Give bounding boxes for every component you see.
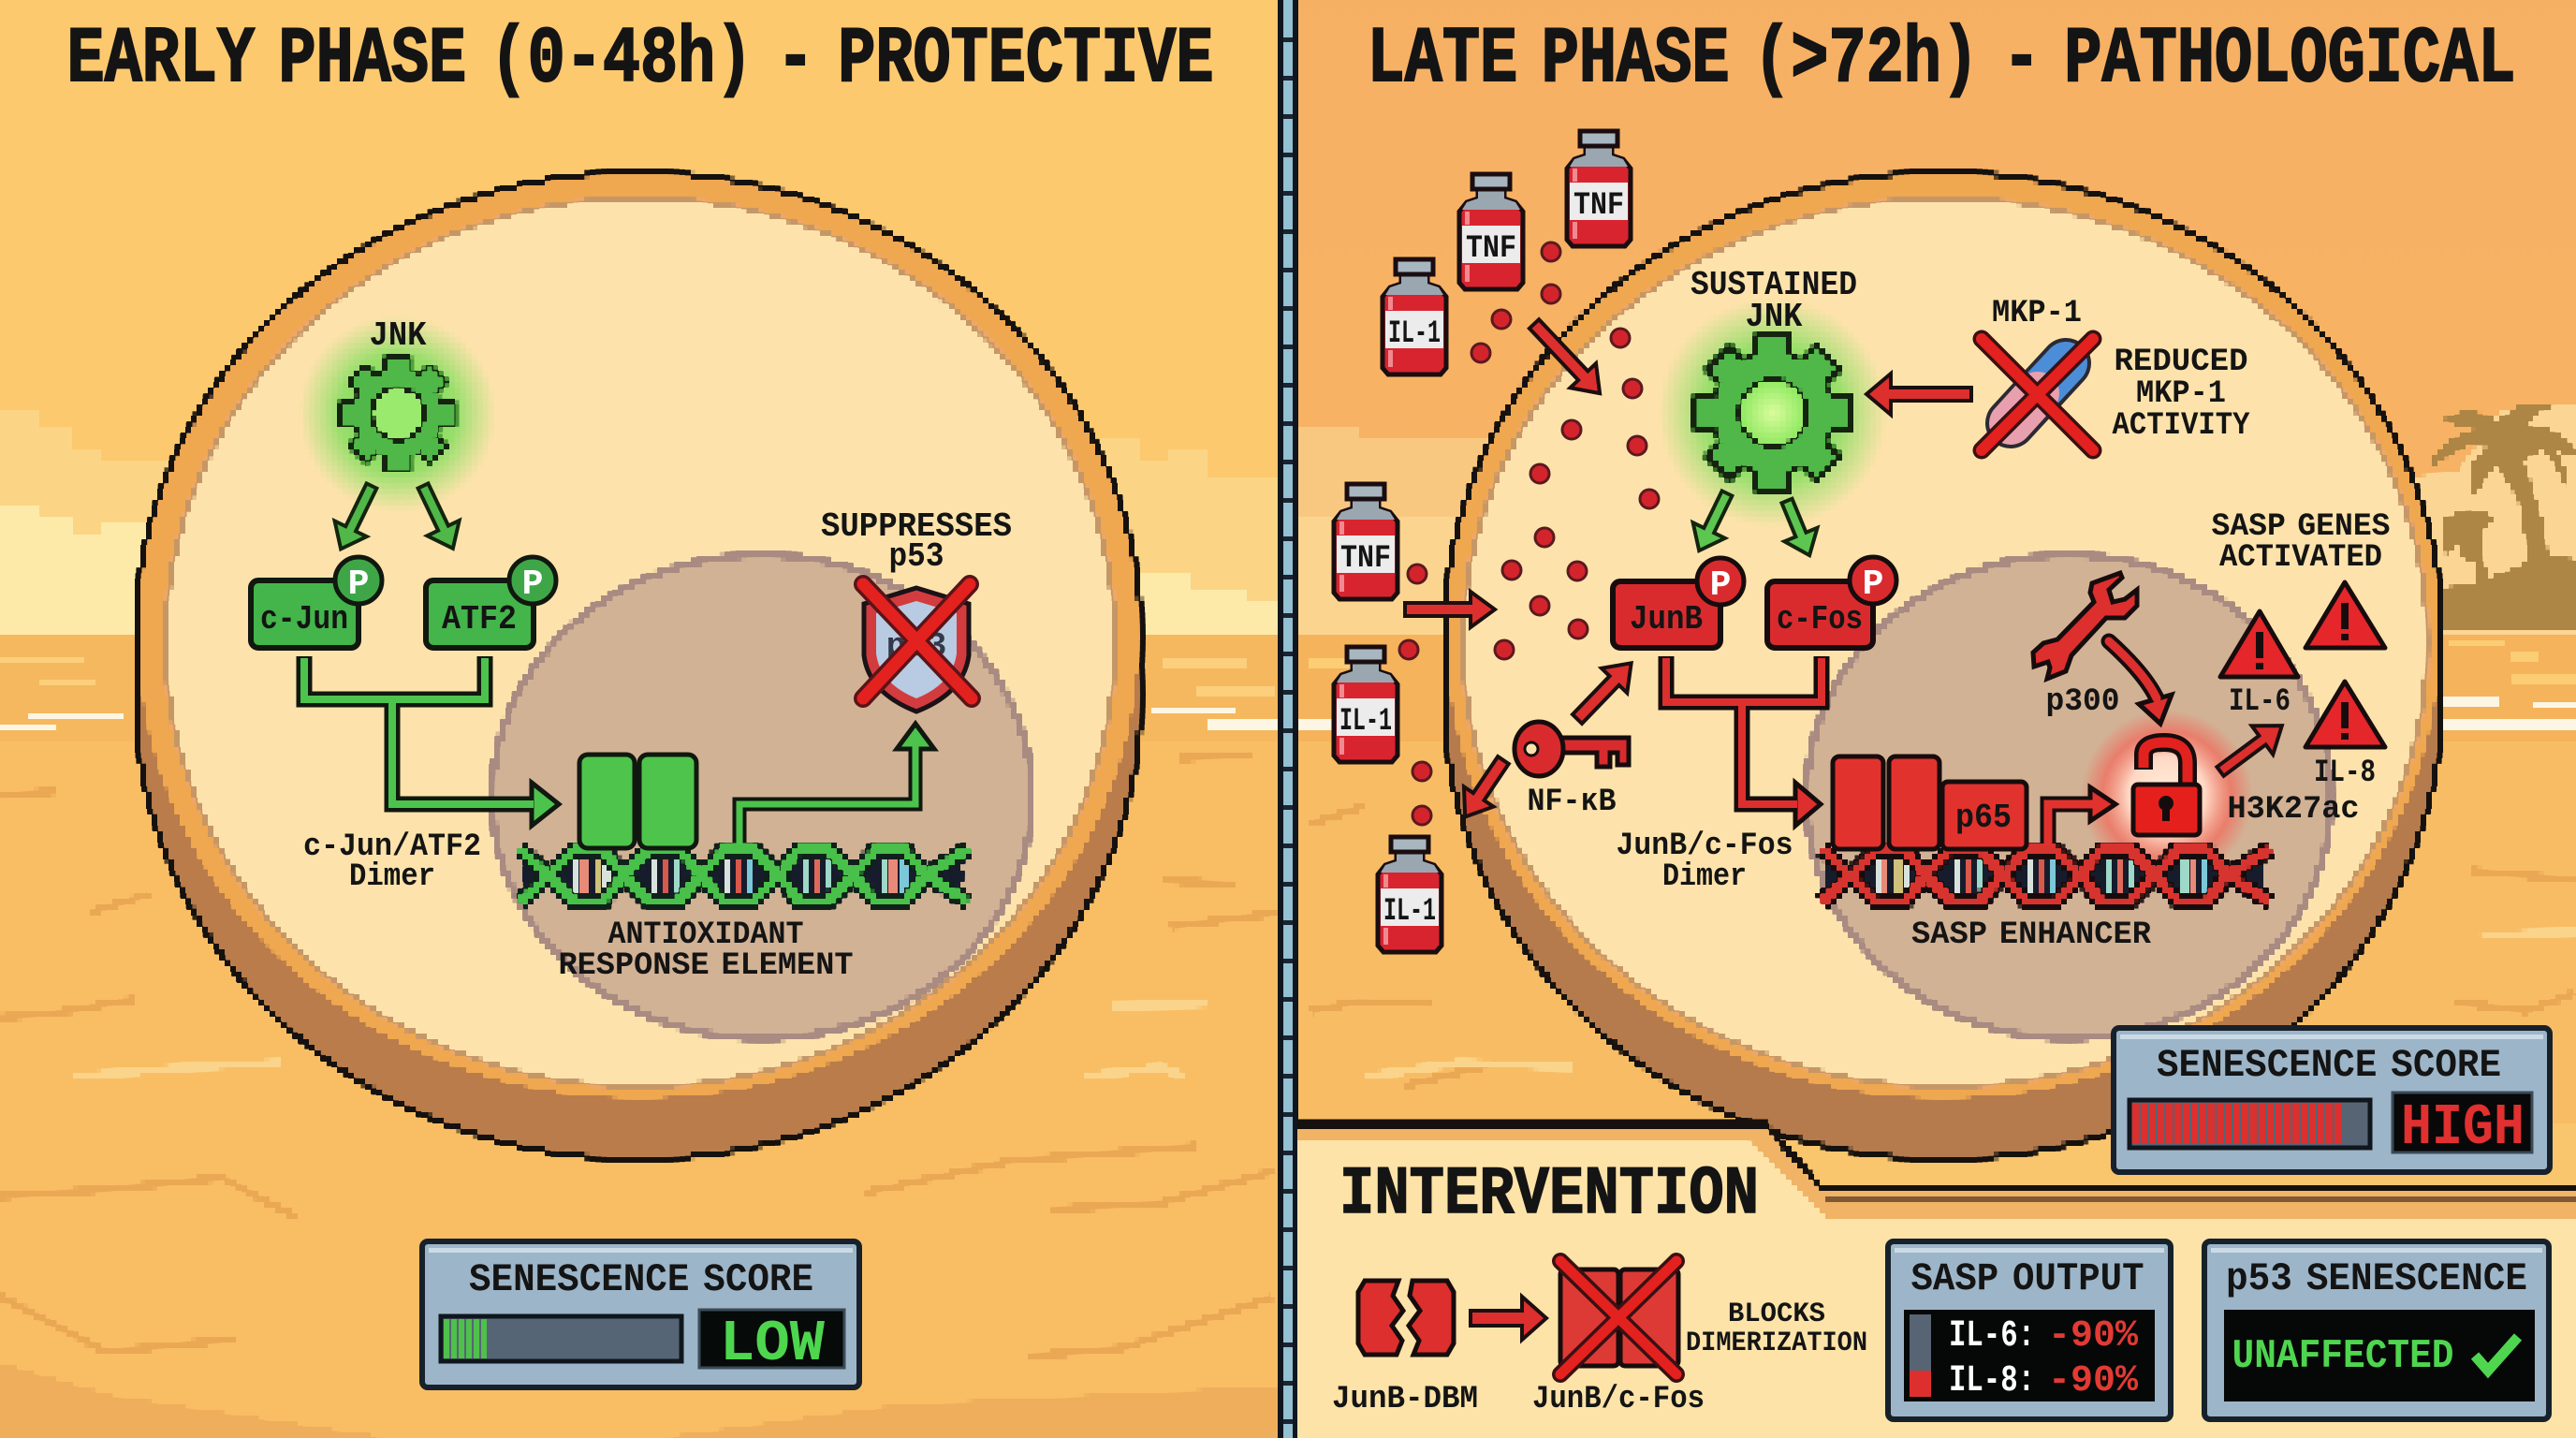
JunB/c-Fos dimer label [1616, 829, 1793, 895]
ATF2 factor: ATF2 [442, 600, 517, 638]
arrow MKP-1 to JNK [1866, 374, 1971, 415]
open lock icon [2133, 742, 2200, 835]
p53 shield crossed out [863, 584, 972, 712]
JunB/c-Fos blocked dimer [1560, 1261, 1678, 1374]
JunB/c-Fos dimer label: Dimer [1662, 859, 1747, 895]
icon: check mark [2475, 1337, 2518, 1371]
panel: early phase [67, 16, 1213, 1387]
JunB factor: P [1710, 565, 1731, 606]
palm trees [2432, 403, 2576, 632]
cytokine vial: TNF: TNF [1466, 231, 1516, 267]
senescence score gauge: low: SENESCENCE SCORE [469, 1257, 813, 1302]
senescence score gauge: high: HIGH [2401, 1094, 2525, 1161]
c-Jun/ATF2 dimer label: c-Jun/ATF2 [303, 829, 481, 865]
DNA SASP enhancer [1822, 849, 2270, 902]
intervention heading: INTERVENTION [1339, 1156, 1759, 1233]
background: early phase beach scene [0, 0, 1279, 1438]
cytokine vial: IL-1 [1383, 259, 1446, 374]
cytokine vial: IL-1 [1334, 647, 1398, 762]
reduced MKP-1 activity label: REDUCED [2114, 345, 2248, 380]
c-Jun/ATF2 dimer label: Dimer [349, 859, 435, 895]
background: late phase beach scene [1298, 0, 2576, 1217]
SASP genes activated label: SASP GENES [2211, 509, 2391, 545]
MKP-1 capsule crossed out [1982, 339, 2093, 450]
IL-8 label: IL-8 [2314, 756, 2376, 791]
lock glow [2081, 710, 2253, 882]
senescence score gauge: low [422, 1241, 859, 1387]
warning triangle: IL-6 [2220, 611, 2298, 677]
SASP enhancer label: SASP ENHANCER [1911, 917, 2152, 953]
c-Jun factor: P [348, 565, 369, 605]
cytokine vial: TNF [1334, 484, 1398, 599]
cytokine entry arrows [1405, 312, 1644, 827]
c-Jun factor [251, 557, 382, 648]
c-Jun factor: c-Jun [260, 600, 348, 638]
JunB factor: JunB [1630, 600, 1703, 638]
JunB-DBM label: JunB-DBM [1332, 1382, 1478, 1417]
reduced MKP-1 activity label [2112, 345, 2250, 444]
bound dimer blocks [579, 755, 696, 848]
bound dimer blocks and p65 [1833, 756, 2027, 849]
reduced MKP-1 activity label: ACTIVITY [2112, 408, 2250, 444]
c-Fos factor [1767, 557, 1896, 648]
cytokine vial: TNF [1567, 131, 1631, 246]
SASP output panel: IL-8: [1949, 1360, 2035, 1402]
cytokine vial: IL-1 [1378, 837, 1442, 952]
SASP output panel: -90% [2048, 1360, 2139, 1402]
reduced MKP-1 activity label: MKP-1 [2136, 376, 2226, 412]
NF-kB key icon [1515, 722, 1629, 776]
DNA antioxidant response element [520, 849, 968, 902]
panel: late phase [1334, 16, 2516, 1162]
SASP genes activated label [2211, 509, 2391, 576]
senescence score gauge: low: LOW [720, 1311, 826, 1377]
arrows JNK to factors [325, 478, 469, 557]
blocks dimerization label: BLOCKS [1728, 1299, 1825, 1330]
antioxidant response element label: RESPONSE ELEMENT [558, 948, 854, 984]
panel divider [1278, 0, 1298, 1438]
SASP genes activated label: ACTIVATED [2219, 540, 2382, 576]
sustained JNK label [1690, 266, 1857, 336]
nucleus [1807, 555, 2331, 1038]
NF-kB label: NF-κB [1528, 785, 1616, 820]
dimer bracket arrow [304, 656, 559, 826]
antioxidant response element label [558, 917, 854, 984]
cytokine vial: IL-1: IL-1 [1383, 894, 1436, 930]
cytokine vial: TNF [1459, 174, 1523, 289]
intervention backdrop [1298, 1124, 2576, 1438]
senescence score gauge: high: SENESCENCE SCORE [2157, 1043, 2501, 1088]
JNK label: JNK [369, 316, 427, 355]
JunB/c-Fos label: JunB/c-Fos [1532, 1382, 1705, 1417]
cytokine vial: IL-1: IL-1 [1339, 704, 1392, 740]
p53 shield crossed out: p53 [886, 627, 946, 666]
IL-6 label: IL-6 [2229, 684, 2291, 720]
transcription output arrow [739, 724, 934, 844]
cell disc [1442, 169, 2445, 1162]
curved arrow p300 to lock [2109, 641, 2172, 724]
cell disc [133, 169, 1144, 1162]
sustained JNK label: JNK [1745, 298, 1803, 336]
arrow lock to genes [2210, 712, 2292, 785]
sustained JNK label: SUSTAINED [1690, 266, 1857, 304]
SASP output panel [1888, 1241, 2171, 1419]
c-Fos factor: c-Fos [1777, 600, 1863, 638]
SASP output panel: IL-6: [1949, 1315, 2035, 1357]
sustained JNK gear icon [1659, 299, 1887, 527]
antioxidant response element label: ANTIOXIDANT [608, 917, 803, 953]
panel: intervention [1298, 1124, 2576, 1438]
bound dimer blocks and p65: p65 [1955, 799, 2012, 837]
blocks dimerization label [1686, 1299, 1867, 1359]
p53 senescence panel: UNAFFECTED [2232, 1333, 2454, 1380]
p53 senescence panel [2204, 1241, 2549, 1419]
c-Jun/ATF2 dimer label [303, 829, 481, 895]
nucleus [492, 555, 1032, 1038]
JunB factor [1613, 558, 1744, 648]
cytokine vial: TNF: TNF [1573, 188, 1624, 224]
arrow to target [1471, 1297, 1546, 1340]
blocks dimerization label: DIMERIZATION [1686, 1328, 1867, 1359]
cytokine vial: TNF: TNF [1340, 541, 1391, 577]
p300 label: p300 [2046, 684, 2119, 720]
wrench p300 icon [2033, 573, 2137, 679]
cytokine vial: IL-1: IL-1 [1388, 316, 1441, 352]
c-Fos factor: P [1863, 565, 1883, 605]
H3K27ac label: H3K27ac [2228, 792, 2359, 828]
suppresses p53 label: p53 [889, 537, 944, 576]
SASP output panel: -90% [2048, 1315, 2139, 1357]
JunB/c-Fos dimer label: JunB/c-Fos [1616, 829, 1793, 864]
title: early phase: EARLY PHASE (0-48h) - PROTECTIVE [67, 16, 1213, 105]
JunB-DBM icon [1358, 1281, 1454, 1355]
MKP-1 label: MKP-1 [1992, 296, 2082, 331]
suppresses p53 label [821, 507, 1012, 576]
p53 senescence panel: p53 SENESCENCE [2226, 1256, 2527, 1301]
arrows JNK to factors [1683, 486, 1826, 562]
ATF2 factor [426, 557, 556, 648]
suppresses p53 label: SUPPRESSES [821, 507, 1012, 546]
dimer bracket arrow [1666, 656, 1822, 826]
warning triangle [2305, 582, 2385, 648]
arrow p65 to lock [2048, 787, 2115, 845]
senescence score gauge: high [2114, 1028, 2550, 1172]
JNK gear icon [300, 315, 496, 512]
SASP output panel: SASP OUTPUT [1911, 1256, 2144, 1301]
cytokine particles [1399, 242, 1659, 825]
ATF2 factor: P [522, 565, 543, 605]
warning triangle: IL-8 [2305, 682, 2385, 747]
